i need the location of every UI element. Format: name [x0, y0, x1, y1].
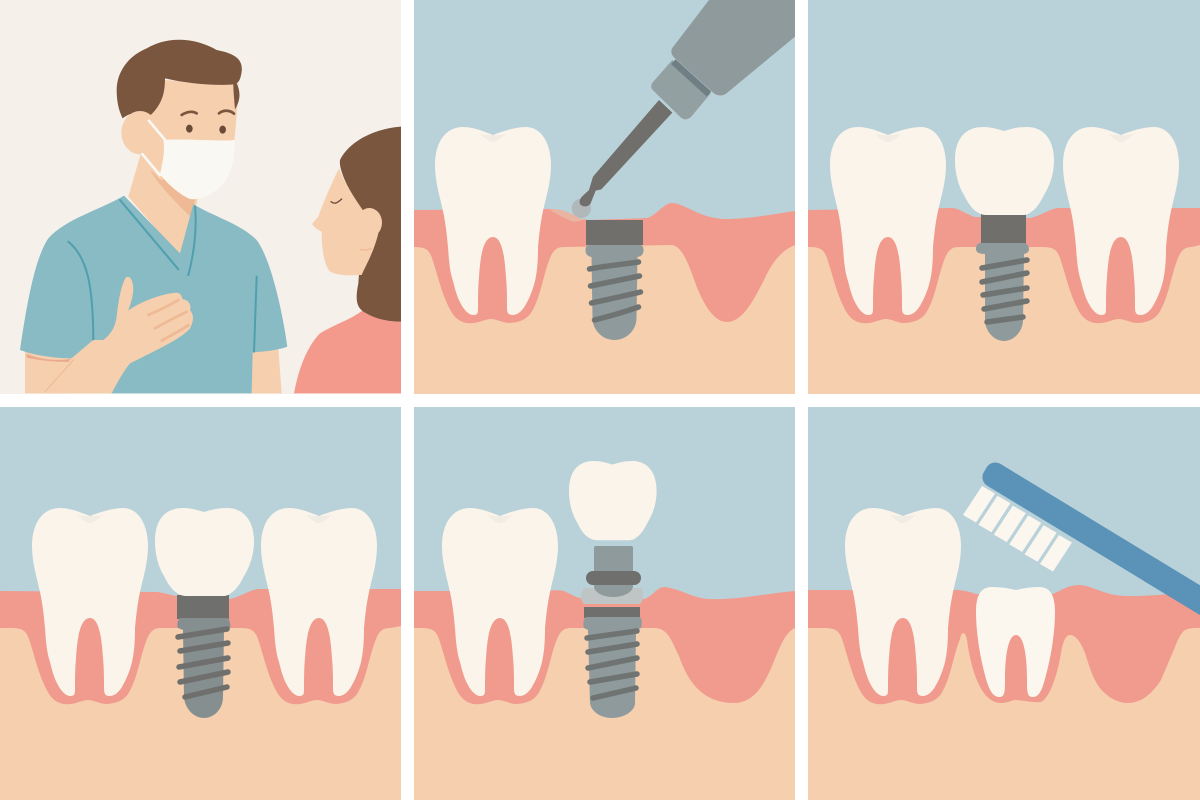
crown [955, 127, 1054, 215]
panel: crown fitted between two teeth [808, 0, 1200, 394]
large natural tooth [845, 508, 961, 696]
panel: completed implant crown in place [0, 407, 401, 800]
gum tissue [808, 208, 1200, 340]
abutment with ring [586, 546, 641, 597]
left natural tooth [830, 127, 946, 315]
right natural tooth [1063, 127, 1179, 315]
jaw bone [808, 245, 1200, 394]
jaw bone [0, 626, 401, 800]
panel: brushing after treatment [808, 407, 1200, 800]
dental drill handpiece [572, 0, 795, 218]
jaw bone [808, 628, 1200, 800]
jaw bone [414, 628, 795, 800]
crown [155, 508, 254, 596]
gum tissue [414, 203, 795, 340]
dentist figure [20, 40, 287, 393]
natural tooth [435, 127, 551, 315]
patient figure [294, 127, 401, 393]
jaw bone [414, 245, 795, 394]
gum tissue [414, 587, 795, 741]
small tooth [976, 587, 1055, 697]
gum tissue [0, 589, 401, 741]
gum tissue [808, 585, 1200, 741]
panel: drilling the implant site [414, 0, 795, 394]
panel: consultation with dentist and patient [0, 0, 401, 394]
right natural tooth [261, 508, 377, 696]
left natural tooth [32, 508, 148, 696]
implant screw [581, 588, 643, 718]
implant with abutment [976, 214, 1029, 341]
implant with abutment [177, 595, 230, 718]
natural tooth [442, 508, 558, 696]
toothbrush [963, 459, 1200, 647]
panel: abutment and crown assembly [414, 407, 795, 800]
implant screw [549, 209, 644, 340]
floating crown [569, 461, 657, 540]
